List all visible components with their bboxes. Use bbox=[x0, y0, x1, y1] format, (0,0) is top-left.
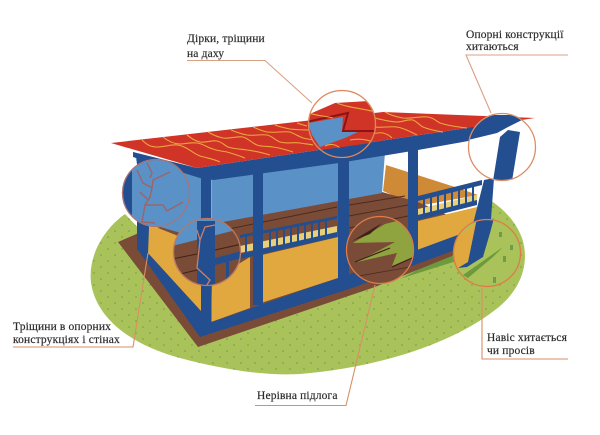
magnifier: post cracks bbox=[172, 218, 242, 291]
magnifier: wall cracks bbox=[121, 158, 190, 228]
magnifier: uneven floor bbox=[346, 215, 420, 284]
railing bbox=[240, 180, 482, 259]
blue back walls bbox=[135, 152, 385, 240]
label: sagging canopy: чи просів bbox=[487, 345, 535, 357]
leader line: canopy bbox=[482, 288, 568, 359]
leader line: roof holes bbox=[187, 60, 312, 103]
label: wall cracks: Тріщини в опорних bbox=[13, 321, 111, 333]
label: shaky supports: Опорні конструкції bbox=[466, 29, 564, 41]
label: roof holes: Дірки, тріщини bbox=[187, 33, 265, 45]
lawn bbox=[91, 200, 525, 374]
label: shaky supports: хитаються bbox=[466, 41, 519, 53]
roof tile lines bbox=[142, 112, 467, 162]
magnifier: sagging canopy bbox=[452, 218, 521, 287]
leader line: cracks bbox=[13, 253, 148, 347]
posts and beams bbox=[133, 116, 520, 322]
deck base beam bbox=[138, 234, 466, 337]
magnifier: roof holes bbox=[308, 90, 376, 158]
deck planks bbox=[214, 196, 408, 232]
magnifier: shaky supports bbox=[468, 113, 536, 181]
back wall bbox=[383, 165, 478, 206]
pavilion shadow on grass bbox=[400, 252, 466, 279]
yellow wall panels bbox=[148, 207, 477, 322]
label: wall cracks: конструкціях і стінах bbox=[13, 334, 120, 346]
roof bbox=[111, 112, 535, 168]
deck floor bbox=[118, 192, 470, 347]
label: roof holes: на даху bbox=[187, 48, 224, 60]
label: sagging canopy: Навіс хитається bbox=[487, 332, 567, 344]
leader line: floor bbox=[255, 285, 375, 406]
leader line: supports bbox=[466, 55, 568, 113]
label: uneven floor: Нерівна підлога bbox=[257, 390, 338, 402]
